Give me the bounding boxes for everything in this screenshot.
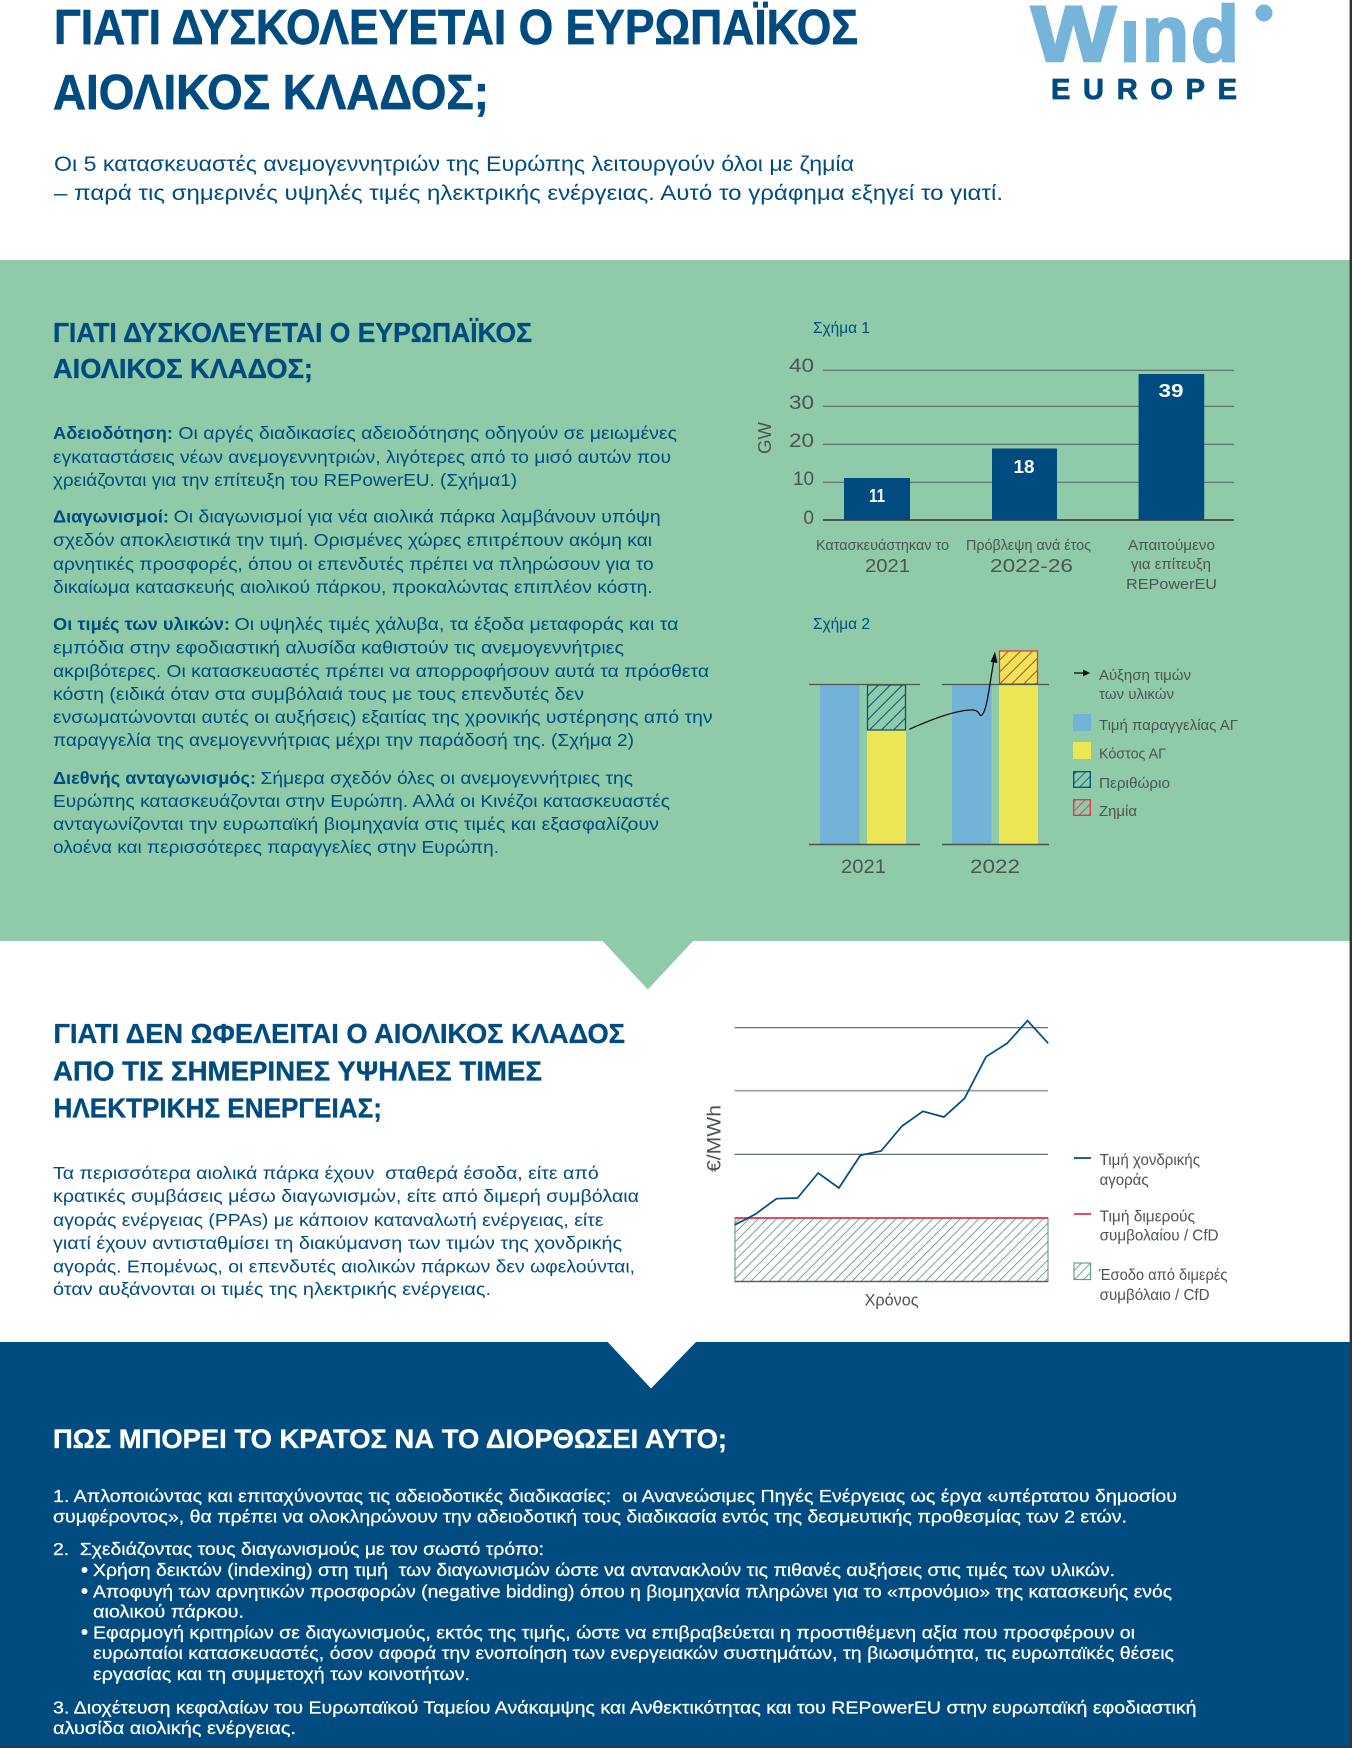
intro text: Οι 5 κατασκευαστές ανεμογεννητριών της Ευρώπης λειτουργούν όλοι με ζημία [54,153,854,176]
text block: material prices: Οι υψηλές τιμές χάλυβα, τα έξοδα μεταφοράς και τα [234,614,678,634]
legend: figure 2: των υλικών [1099,686,1174,703]
hatched area: bilateral contract income [735,1218,1048,1282]
text block: international competition: Ευρώπης κατασκευάζονται στην Ευρώπη. Αλλά οι Κινέζοι κατασκευαστές [53,791,670,811]
heading: section one: ΓΙΑΤΙ ΔΥΣΚΟΛΕΥΕΤΑΙ Ο ΕΥΡΩΠΑΪΚΟΣ [53,317,532,348]
blue line: wholesale price [735,1021,1048,1225]
legend: price chart: Τιμή διμερούς [1100,1209,1195,1226]
text block: permitting: εγκαταστάσεις νέων ανεμογεννητριών, λιγότερες από το μισό αυτών που [53,447,671,467]
category labels: Απαιτούμενο [1128,537,1215,554]
chart: figure 1 bar chart: 20 [789,431,814,452]
text block: item 2: Χρήση δεικτών (indexing) στη τιμή των διαγωνισμών ώστε να αντανακλούν τις πιθανές αυξήσεις στις τιμές των υλικών. [93,1560,1115,1580]
axis label: time: Χρόνος [865,1291,919,1310]
logo: WindEurope [1031,0,1272,106]
arrow: green triangle pointer [602,940,694,990]
text block: tenders [53,506,661,597]
legend: price chart: συμβόλαιο / CfD [1100,1287,1210,1304]
text block: tenders: αρνητικές προσφορές, όπου οι επενδυτές πρέπει να πληρώσουν για το [53,554,654,574]
text block: tenders: Οι διαγωνισμοί για νέα αιολικά πάρκα λαμβάνουν υπόψη [174,506,661,526]
text block: section two body: όταν αυξάνονται οι τιμές της ηλεκτρικής ενέργειας. [53,1279,491,1299]
text block: section two body: αγοράς. Επομένως, οι επενδυτές αιολικών πάρκων δεν ωφελούνται, [53,1257,635,1277]
chart: figure 1 bar chart [755,320,1234,593]
chart: figure 1 bar chart: 10 [793,469,814,490]
category labels [816,537,1217,593]
legend: figure 2: Αύξηση τιμών [1099,667,1191,684]
legend: figure 2: Κόστος ΑΓ [1099,746,1166,763]
text block: permitting: Αδειοδότηση: [53,423,173,443]
bars: 2021: 2021 [841,857,886,878]
chart: figure 2 stacked bars: Σχήμα 2 [813,616,870,633]
legend: figure 2: Περιθώριο [1099,775,1170,792]
chart: figure 1 bar chart: Σχήμα 1 [813,320,870,337]
text block: permitting: Οι αργές διαδικασίες αδειοδότησης οδηγούν σε μειωμένες [178,423,677,443]
text block: item 2: ευρωπαίοι κατασκευαστές, όσον αφορά την ενοποίηση των ενεργειακών συστημάτων, τη βιωσιμότητα, τις ευρωπαϊκές θέσεις [93,1643,1174,1663]
text block: item 2: Εφαρμογή κριτηρίων σε διαγωνισμούς, εκτός της τιμής, ώστε να επιβραβεύεται η προστιθέμενη αξία που προσφέρουν οι [93,1622,1135,1642]
category labels: 2021 [865,555,910,576]
text block: permitting [53,423,677,490]
text block: tenders: σχεδόν αποκλειστικά την τιμή. Ορισμένες χώρες επιτρέπουν ακόμη και [53,530,652,550]
text block: tenders: δικαίωμα κατασκευής αιολικού πάρκου, προκαλώντας επιπλέον κόστη. [53,577,653,597]
text block: item 3: αλυσίδα αιολικής ενέργειας. [53,1718,296,1738]
legend: price chart: Τιμή χονδρικής [1100,1152,1200,1169]
arrow: materials price rise [909,652,998,729]
text block: international competition: Σήμερα σχεδόν όλες οι ανεμογεννήτριες της [260,768,633,788]
legend: price chart: Έσοδο από διμερές [1098,1267,1228,1284]
main title: ΓΙΑΤΙ ΔΥΣΚΟΛΕΥΕΤΑΙ Ο ΕΥΡΩΠΑΪΚΟΣ [54,1,858,55]
legend: figure 2 [1073,667,1238,820]
category labels: REPowerEU [1126,576,1217,593]
intro text [54,153,1003,205]
category labels: Κατασκευάστηκαν το [816,537,949,554]
text block: material prices: ακριβότερες. Οι κατασκευαστές πρέπει να απορροφήσουν αυτά τα πρόσθετα [53,661,709,681]
legend: price chart: αγοράς [1100,1172,1149,1189]
heading: section one [53,317,532,384]
text block: section two body [53,1163,639,1299]
panel: what the state can do [0,1342,1352,1748]
text block: material prices: ενσωματώνονται αυτές οι αυξήσεις) εξαιτίας της χρονικής υστέρησης από την [53,707,713,727]
bars: 2022: 2022 [970,857,1020,878]
red line: contract price [735,1217,1048,1219]
text block: tenders: Διαγωνισμοί: [53,506,169,526]
text block: material prices [53,614,713,750]
text block: item 1 [53,1486,1177,1527]
arrow: white triangle pointer [608,1342,696,1388]
intro text: – παρά τις σημερινές υψηλές τιμές ηλεκτρικής ενέργειας. Αυτό το γράφημα εξηγεί το γιατί. [54,182,1003,205]
legend: figure 2: Τιμή παραγγελίας ΑΓ [1099,717,1238,734]
category labels: Πρόβλεψη ανά έτος [966,537,1091,554]
text block: item 3 [53,1697,1196,1738]
text block: item 1: συμφέροντος», θα πρέπει να ολοκληρώνουν την αδειοδοτική τους διαδικασία εντός της δεσμευτικής προθεσμίας των 2 ετών. [53,1507,1127,1527]
text block: item 1: 1. Απλοποιώντας και επιταχύνοντας τις αδειοδοτικές διαδικασίες: οι Ανανεώσιμες Πηγές Ενέργειας ως έργα «υπέρτατου δημοσίου [53,1486,1177,1506]
text block: international competition: Διεθνής ανταγωνισμός: [53,768,256,788]
text block: section two body: κρατικές συμβάσεις μέσω διαγωνισμών, είτε από διμερή συμβόλαια [53,1186,639,1206]
bars: 2021 [809,684,920,878]
chart: figure 1 bar chart: 30 [789,393,814,414]
category labels: για επίτευξη [1131,556,1211,573]
text block: item 3: 3. Διοχέτευση κεφαλαίων του Ευρωπαϊκού Ταμείου Ανάκαμψης και Ανθεκτικότητας και του REPowerEU στην ευρωπαϊκή εφοδιαστική [53,1697,1196,1717]
legend: figure 2: Ζημία [1099,803,1137,820]
panel: why the sector struggles [0,260,1352,941]
text block: item 2: Αποφυγή των αρνητικών προσφορών (negative bidding) όπου η βιομηχανία πληρώνει για το «προνόμιο» της κατασκευής ενός [93,1581,1172,1601]
text block: material prices: παραγγελία της ανεμογεννήτριας μέχρι την παράδοσή της. (Σχήμα 2) [53,730,634,750]
bar: 2022-26: 18 [1014,457,1034,477]
text block: item 2: εργασίας και τη συμμετοχή των κοινοτήτων. [93,1664,470,1684]
text block: item 2: αιολικού πάρκου. [93,1602,244,1622]
text block: item 2 [53,1539,1174,1684]
chart: figure 1 bar chart: 40 [789,356,814,377]
bar: REPowerEU [1139,374,1204,520]
text block: permitting: χρειάζονται για την επίτευξη του REPowerEU. (Σχήμα1) [53,470,517,490]
legend: price chart [1074,1152,1228,1304]
text block: international competition: ολοένα και περισσότερες παραγγελίες στην Ευρώπη. [53,837,499,857]
heading: section one: ΑΙΟΛΙΚΟΣ ΚΛΑΔΟΣ; [53,353,313,384]
legend: price chart: συμβολαίου / CfD [1100,1228,1219,1245]
bar: 2021 [844,478,910,520]
chart: figure 2 stacked bars [809,616,1238,878]
main title [53,1,858,120]
logo: WindEurope: EUROPE [1051,74,1237,106]
text block: section two body: γιατί έχουν αντισταθμίσει τη διακύμανση των τιμών της χονδρικής [53,1233,622,1253]
text block: material prices: Οι τιμές των υλικών: [53,614,230,634]
heading: section two [53,1018,625,1123]
heading: section two: ΗΛΕΚΤΡΙΚΗΣ ΕΝΕΡΓΕΙΑΣ; [54,1092,382,1123]
text block: international competition: ανταγωνίζονται την ευρωπαϊκή βιομηχανία στις τιμές και εξασφαλίζουν [53,814,659,834]
text block: international competition [53,768,670,857]
bar: 2021: 11 [869,486,885,506]
heading: section three: ΠΩΣ ΜΠΟΡΕΙ ΤΟ ΚΡΑΤΟΣ ΝΑ ΤΟ ΔΙΟΡΘΩΣΕΙ ΑΥΤΟ; [53,1424,727,1454]
axis label: GW: GW [755,422,775,454]
axis label: euro per MWh: €/MWh [704,1105,726,1172]
text block: item 2: 2. Σχεδιάζοντας τους διαγωνισμούς με τον σωστό τρόπο: [53,1539,544,1559]
bar: REPowerEU: 39 [1158,381,1184,401]
text block: material prices: εμπόδια στην εφοδιαστική αλυσίδα καθιστούν τις ανεμογεννήτριες [53,638,624,658]
bar: 2022-26 [992,448,1057,520]
bars: 2022 [942,651,1049,878]
chart: price line chart [704,1021,1228,1310]
chart: figure 1 bar chart: 0 [803,508,814,529]
main title: ΑΙΟΛΙΚΟΣ ΚΛΑΔΟΣ; [53,66,489,120]
text block: section two body: Τα περισσότερα αιολικά πάρκα έχουν σταθερά έσοδα, είτε από [53,1163,599,1183]
heading: section two: ΑΠΟ ΤΙΣ ΣΗΜΕΡΙΝΕΣ ΥΨΗΛΕΣ ΤΙΜΕΣ [53,1056,542,1087]
text block: section two body: αγοράς ενέργειας (PPAs) με κάποιον καταναλωτή ενέργειας, είτε [53,1210,604,1230]
heading: section two: ΓΙΑΤΙ ΔΕΝ ΩΦΕΛΕΙΤΑΙ Ο ΑΙΟΛΙΚΟΣ ΚΛΑΔΟΣ [54,1018,625,1049]
text block: material prices: κόστη (ειδικά όταν στα συμβόλαιά τους με τους επενδυτές δεν [53,684,584,704]
category labels: 2022-26 [990,555,1073,576]
